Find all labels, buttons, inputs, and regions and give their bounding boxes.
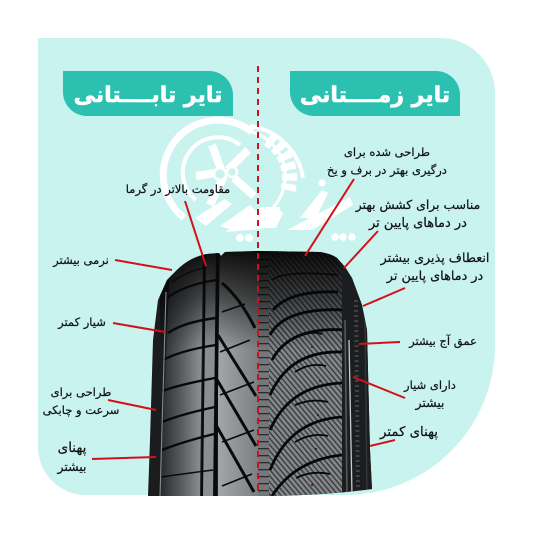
callout: flexibility [363, 250, 489, 306]
callout: flexibility: انعطاف پذیری بیشتر [380, 250, 489, 266]
callout: flexibility: در دماهای پایین تر [386, 269, 483, 284]
callout: softer: نرمی بیشتر [52, 253, 109, 268]
callout: more grooves: بیشتر [414, 395, 445, 411]
heading: summer tire: تایر تابــــتانی [74, 83, 222, 108]
callout: narrower: پهنای کمتر [379, 425, 438, 440]
heading: winter tire [290, 71, 460, 116]
callout: tread depth: عمق آج بیشتر [408, 334, 477, 349]
callout: more grooves: دارای شیار [403, 378, 456, 393]
center dashed divider [257, 66, 259, 495]
callout: wider: پهنای [58, 440, 87, 456]
callouts: winter [305, 145, 489, 446]
callout: snow traction [305, 145, 447, 256]
watermark logo [163, 120, 356, 242]
callout: heat resistance: مقاومت بالاتر در گرما [126, 182, 230, 197]
callout: tread depth [359, 334, 477, 349]
heading: winter tire: تایر زمــــتانی [300, 83, 450, 108]
heading: summer tire [63, 71, 233, 116]
callout: low temp traction: مناسب برای کشش بهتر [355, 197, 480, 213]
winter tread blocks [258, 250, 382, 500]
background panel [38, 38, 495, 495]
callout: wider: بیشتر [56, 459, 87, 475]
tire [148, 251, 372, 496]
callout: more grooves [353, 377, 456, 411]
callout: fewer grooves [57, 315, 165, 332]
summer tread blocks [160, 250, 260, 496]
callout: speed design [43, 385, 156, 418]
callout: fewer grooves: شیار کمتر [57, 315, 106, 330]
callout: narrower [370, 425, 438, 446]
callout: speed design: طراحی برای [51, 385, 111, 400]
callout: snow traction: درگیری بهتر در برف و یخ [327, 163, 447, 178]
callout: softer [52, 253, 172, 270]
callouts: summer [43, 182, 230, 475]
callout: speed design: سرعت و چابکی [43, 403, 119, 418]
callout: low temp traction: در دماهای پایین تر [368, 216, 467, 231]
callout: snow traction: طراحی شده برای [344, 145, 430, 160]
callout: heat resistance [126, 182, 230, 266]
callout: low temp traction [344, 197, 480, 268]
callout: wider [56, 440, 156, 475]
